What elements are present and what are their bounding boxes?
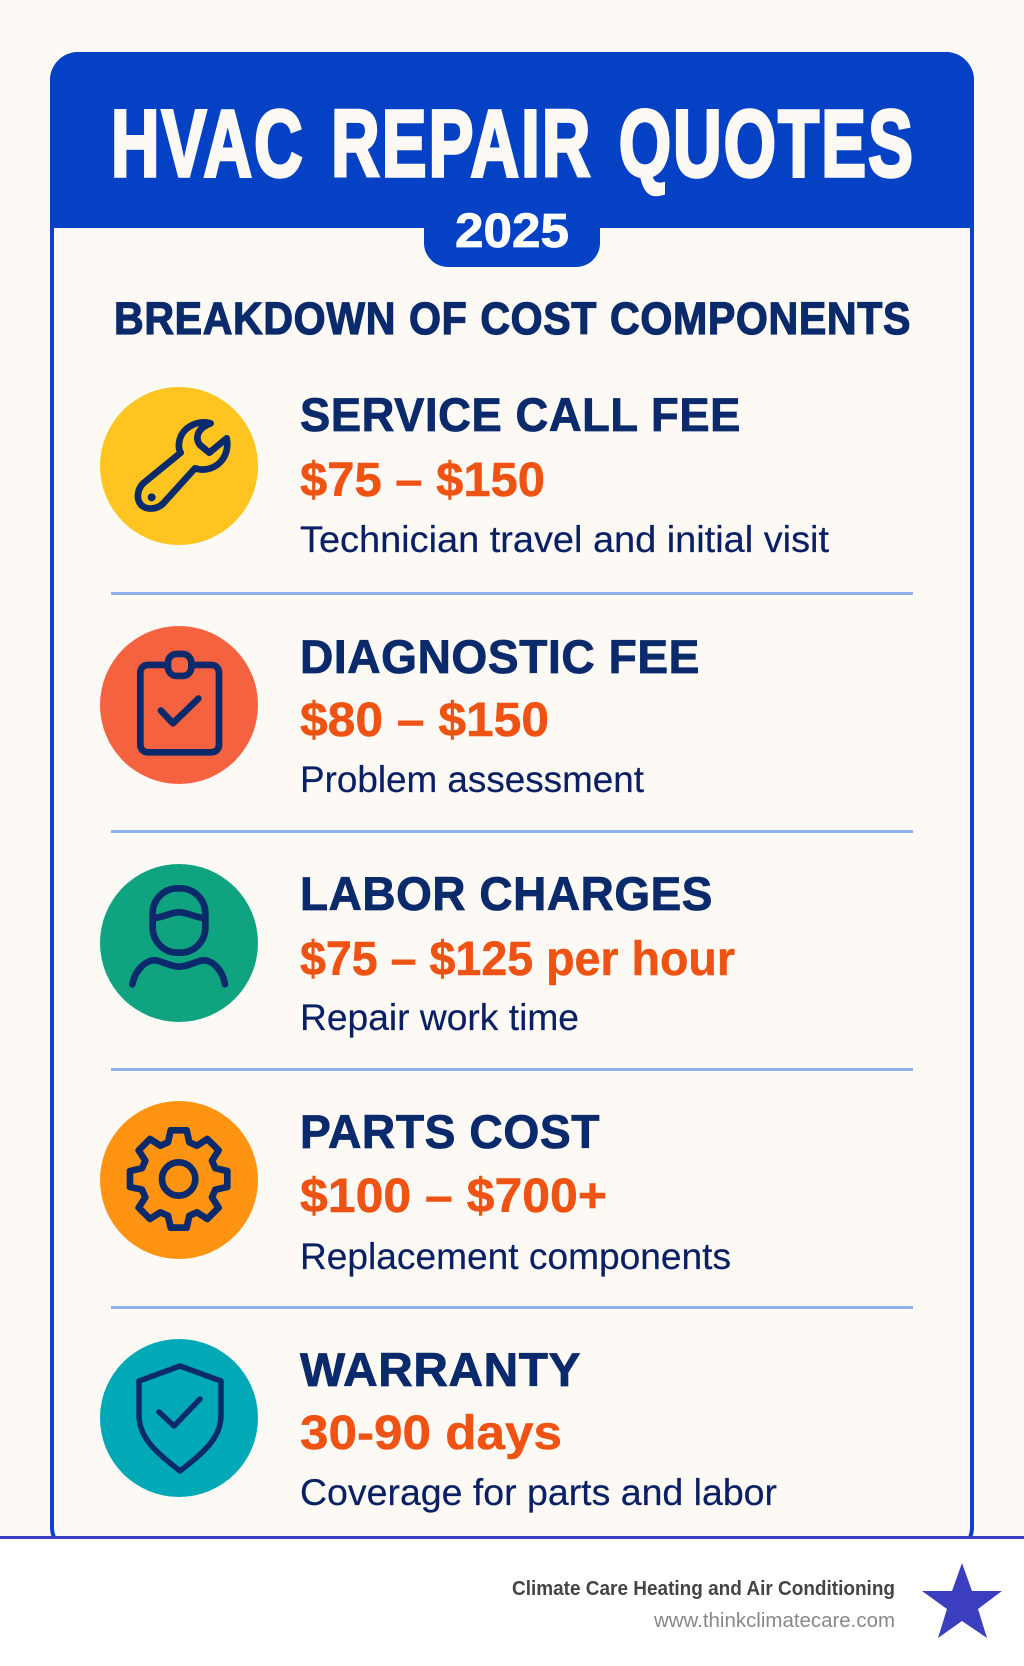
icon: shield bbox=[100, 1339, 258, 1497]
service call text bbox=[300, 388, 830, 560]
parts text: $100 – $700+ bbox=[300, 1170, 607, 1223]
diagnostic text: DIAGNOSTIC FEE bbox=[300, 630, 700, 683]
icon: gear bbox=[100, 1101, 258, 1259]
row: warranty bbox=[100, 1339, 777, 1513]
footer company name: Climate Care Heating and Air Conditioning bbox=[512, 1578, 895, 1600]
parts text bbox=[300, 1105, 731, 1277]
diagnostic text: $80 – $150 bbox=[300, 694, 549, 747]
row: service call fee bbox=[100, 387, 830, 560]
labor text: Repair work time bbox=[300, 997, 579, 1038]
footer url: www.thinkclimatecare.com bbox=[653, 1610, 895, 1632]
diagnostic text bbox=[300, 630, 700, 800]
icon: wrench bbox=[100, 387, 258, 545]
warranty text: WARRANTY bbox=[300, 1343, 581, 1396]
service call text: Technician travel and initial visit bbox=[300, 519, 830, 560]
service call text: SERVICE CALL FEE bbox=[300, 388, 741, 441]
row: parts cost bbox=[100, 1101, 731, 1277]
parts text: PARTS COST bbox=[300, 1105, 600, 1158]
icon: clipboard bbox=[100, 626, 258, 784]
warranty text: 30-90 days bbox=[300, 1407, 562, 1460]
labor text bbox=[300, 867, 735, 1038]
parts text: Replacement components bbox=[300, 1236, 731, 1277]
warranty text bbox=[300, 1343, 777, 1513]
row: diagnostic fee bbox=[100, 626, 700, 800]
warranty text: Coverage for parts and labor bbox=[300, 1472, 777, 1513]
row: labor charges bbox=[100, 864, 735, 1038]
header band bbox=[50, 52, 974, 267]
year badge: 2025 bbox=[455, 205, 569, 258]
icon: technician bbox=[100, 864, 258, 1022]
labor text: LABOR CHARGES bbox=[300, 867, 713, 920]
diagnostic text: Problem assessment bbox=[300, 759, 645, 800]
footer bbox=[0, 1536, 1024, 1666]
section heading: BREAKDOWN OF COST COMPONENTS bbox=[114, 293, 911, 344]
service call text: $75 – $150 bbox=[300, 454, 545, 507]
labor text: $75 – $125 per hour bbox=[300, 933, 735, 986]
icon: star logo bbox=[922, 1563, 1002, 1638]
